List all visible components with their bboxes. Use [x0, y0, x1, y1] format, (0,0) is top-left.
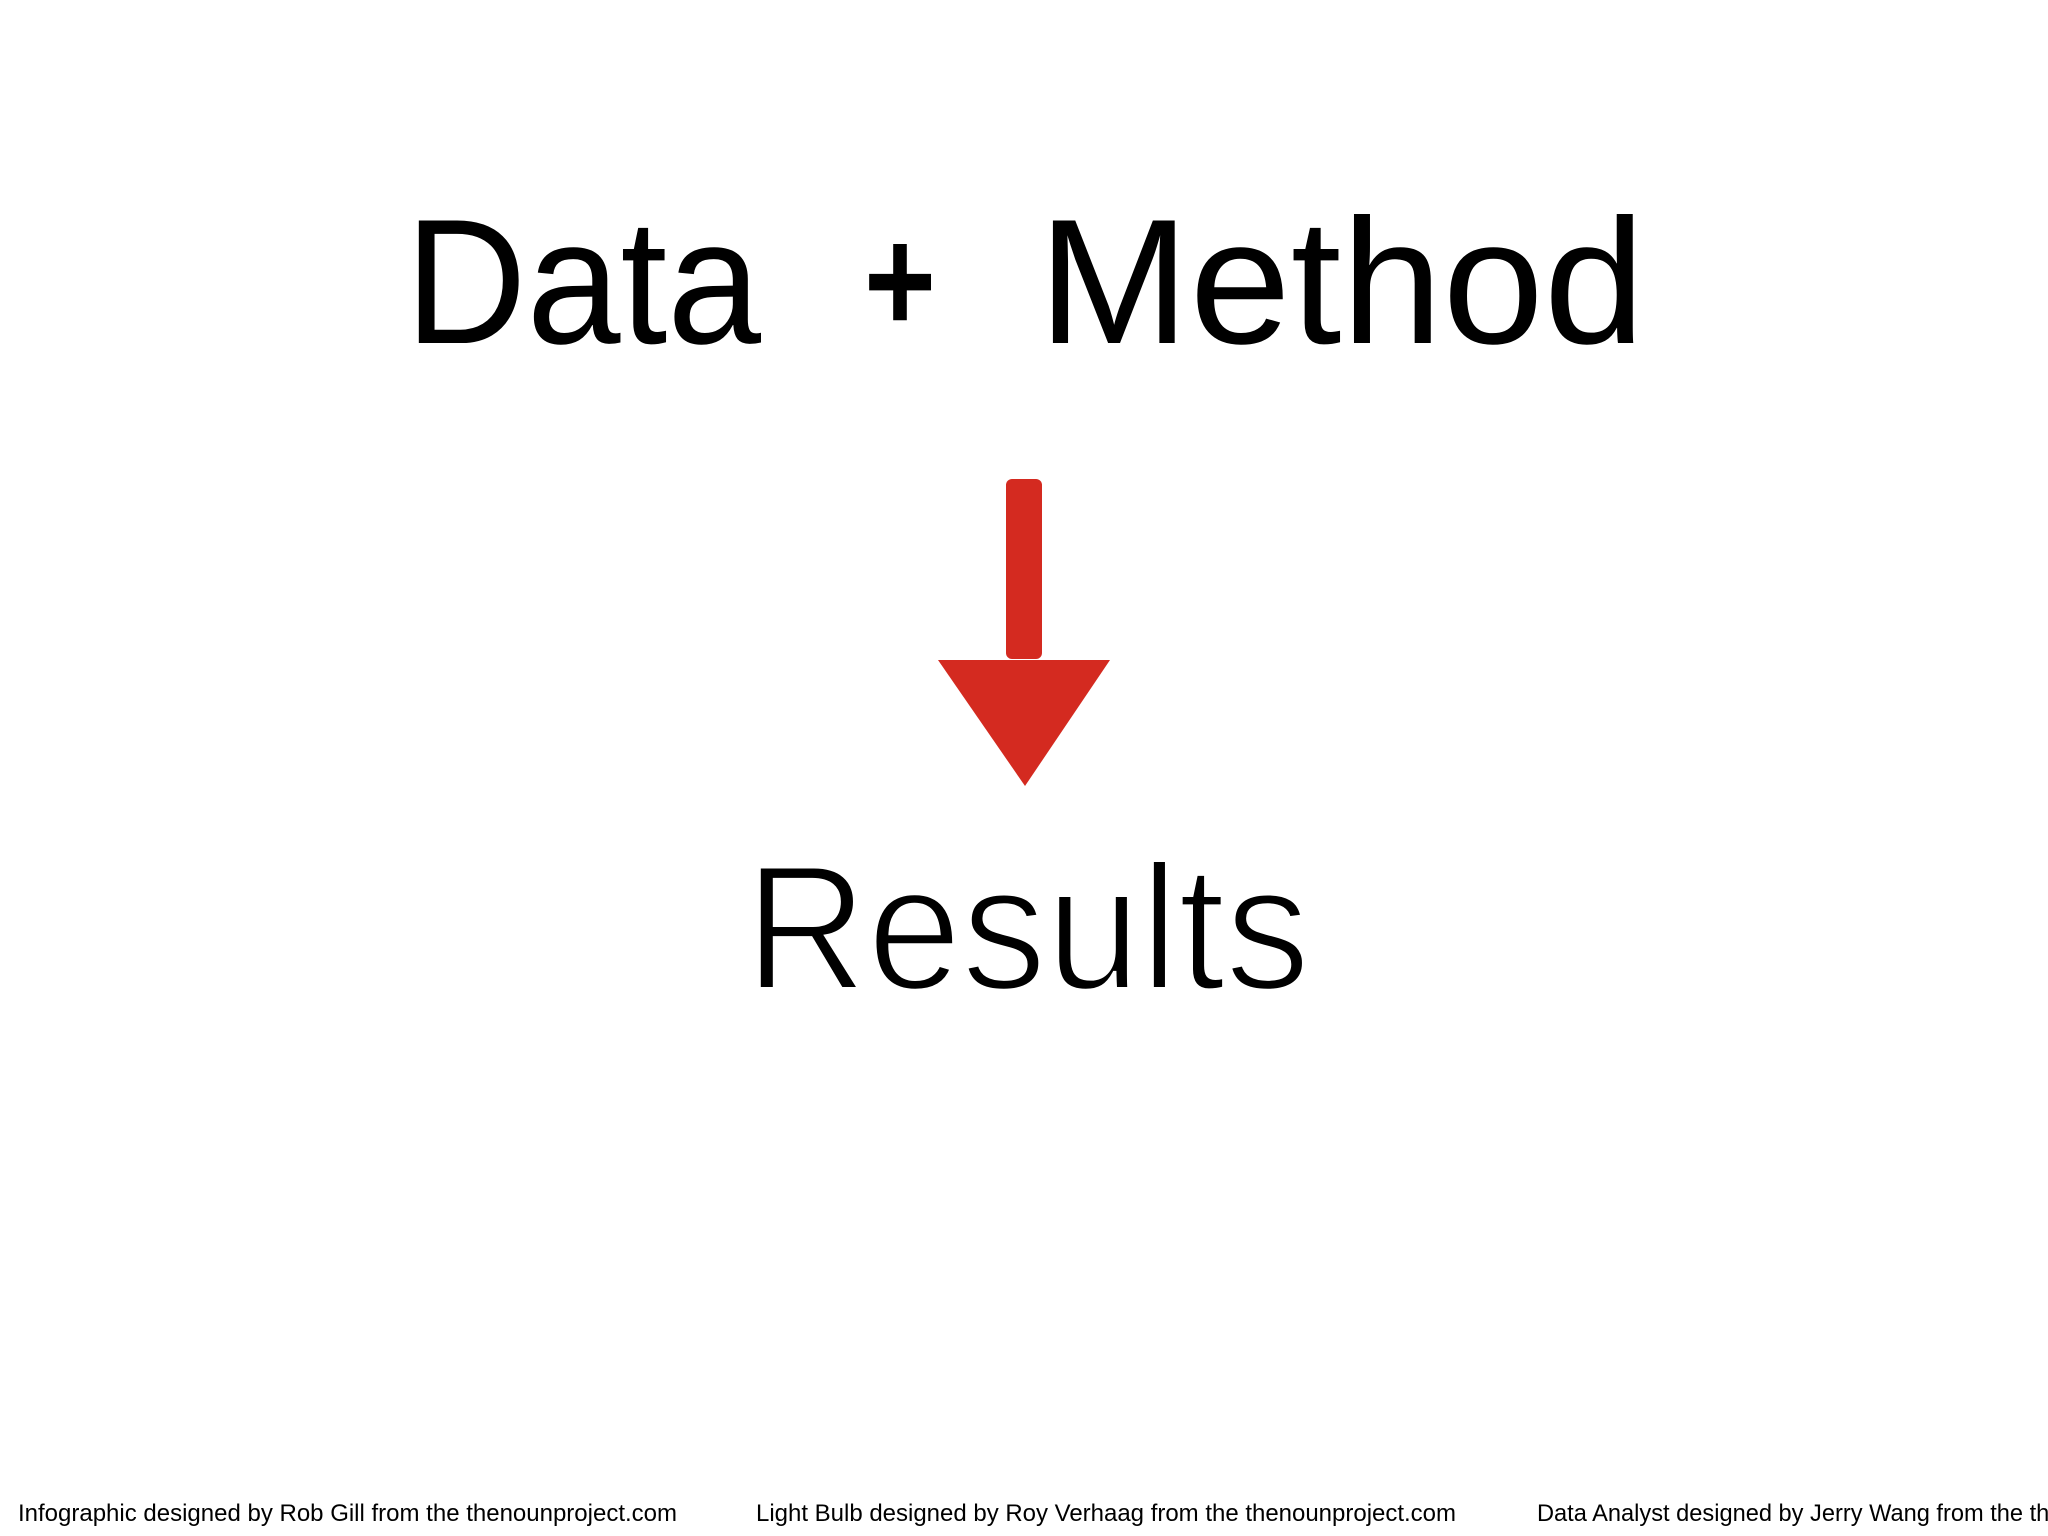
title: Data + Method — [405, 182, 1645, 381]
credit: infographic: Infographic designed by Rob Gill from the thenounproject.com — [18, 1500, 677, 1527]
footer credits — [18, 1500, 2048, 1527]
arrow: red down arrow — [938, 479, 1110, 786]
heading word: Data: Data — [405, 182, 761, 381]
heading word: Method: Method — [1038, 182, 1645, 381]
credit: light bulb: Light Bulb designed by Roy Verhaag from the thenounproject.com — [756, 1500, 1456, 1527]
plus sign: + — [864, 196, 936, 364]
heading: Results: Results — [745, 828, 1310, 1027]
